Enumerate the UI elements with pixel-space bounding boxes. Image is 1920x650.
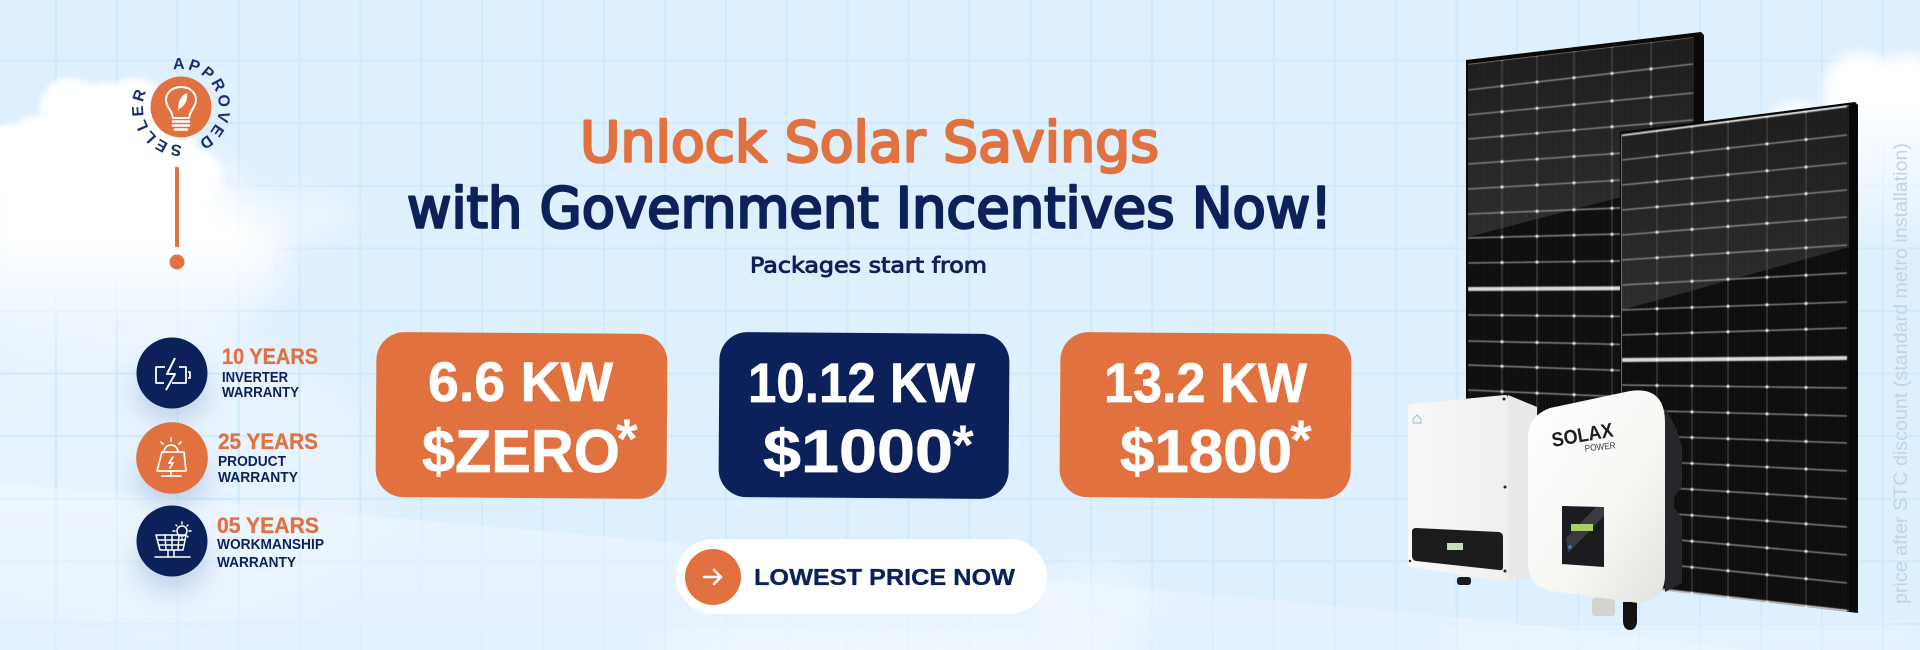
badge: seller approved	[132, 58, 230, 156]
title: with Government Incentives Now!	[407, 177, 1332, 242]
warranty: 25 years product: WARRANTY	[218, 470, 298, 486]
warranty list	[136, 338, 324, 592]
price card: 13.2 KW: *	[1290, 408, 1312, 471]
title	[407, 111, 1332, 242]
brand logo: POWER	[1584, 440, 1616, 453]
price card: 6.6 KW: $ZERO	[422, 418, 620, 485]
logo mark	[1413, 415, 1421, 423]
warranty: 25 years product	[136, 422, 318, 508]
price card: 6.6 KW: *	[616, 407, 638, 470]
price card: 6.6 KW	[375, 332, 668, 499]
inverter connectors	[1592, 598, 1637, 630]
price card: 13.2 KW: 13.2 KW	[1104, 351, 1307, 414]
button: lowest price now	[676, 539, 1047, 614]
price card: 13.2 KW	[1059, 332, 1352, 499]
warranty: 25 years product: 25 YEARS	[218, 429, 318, 454]
circular text: APPROVED SELLER	[132, 58, 230, 156]
price card: 10.12 KW: *	[952, 413, 974, 476]
title: Unlock Solar Savings	[580, 111, 1159, 176]
price card: 6.6 KW: 6.6 KW	[428, 350, 613, 413]
subtitle: Packages start from	[750, 254, 987, 278]
warranty: 05 years workmanship: WARRANTY	[217, 555, 296, 571]
price card: 13.2 KW: $1800	[1120, 418, 1292, 485]
badge circle	[150, 76, 212, 138]
warranty: 05 years workmanship: WORKMANSHIP	[217, 537, 324, 553]
icon: battery with bolt	[156, 358, 190, 390]
price card: 10.12 KW: $1000	[763, 418, 953, 485]
warranty: 05 years workmanship	[136, 506, 324, 592]
inverter: left white unit	[1408, 395, 1537, 585]
icon: solar panel with sun	[155, 522, 191, 557]
icon: solar monitor with sun	[157, 438, 186, 476]
display strip	[1412, 528, 1503, 570]
icon: arrow	[704, 570, 721, 584]
icon: light bulb with leaf	[166, 87, 196, 130]
brand logo: SOLAX	[1550, 419, 1616, 452]
inverter: SolaX unit	[1528, 390, 1665, 603]
warranty: 10 years inverter: 10 YEARS	[222, 344, 318, 369]
solar panel: back	[1466, 32, 1704, 416]
warranty: 10 years inverter: INVERTER	[222, 370, 288, 386]
warranty: 25 years product: PRODUCT	[218, 454, 286, 470]
solar panel: front	[1620, 100, 1858, 615]
button: lowest price now: LOWEST PRICE NOW	[754, 564, 1016, 590]
warranty: 10 years inverter	[136, 338, 318, 422]
footnote: vertical text: price after STC discount (standard metro installation)	[1891, 143, 1912, 604]
inverter bracket	[1665, 408, 1682, 592]
pin line and dot	[170, 167, 184, 270]
price card: 10.12 KW: 10.12 KW	[748, 351, 975, 414]
warranty: 05 years workmanship: 05 YEARS	[217, 513, 319, 538]
price card: 10.12 KW	[718, 332, 1010, 499]
control screen	[1562, 506, 1604, 567]
warranty: 10 years inverter: WARRANTY	[222, 385, 299, 401]
